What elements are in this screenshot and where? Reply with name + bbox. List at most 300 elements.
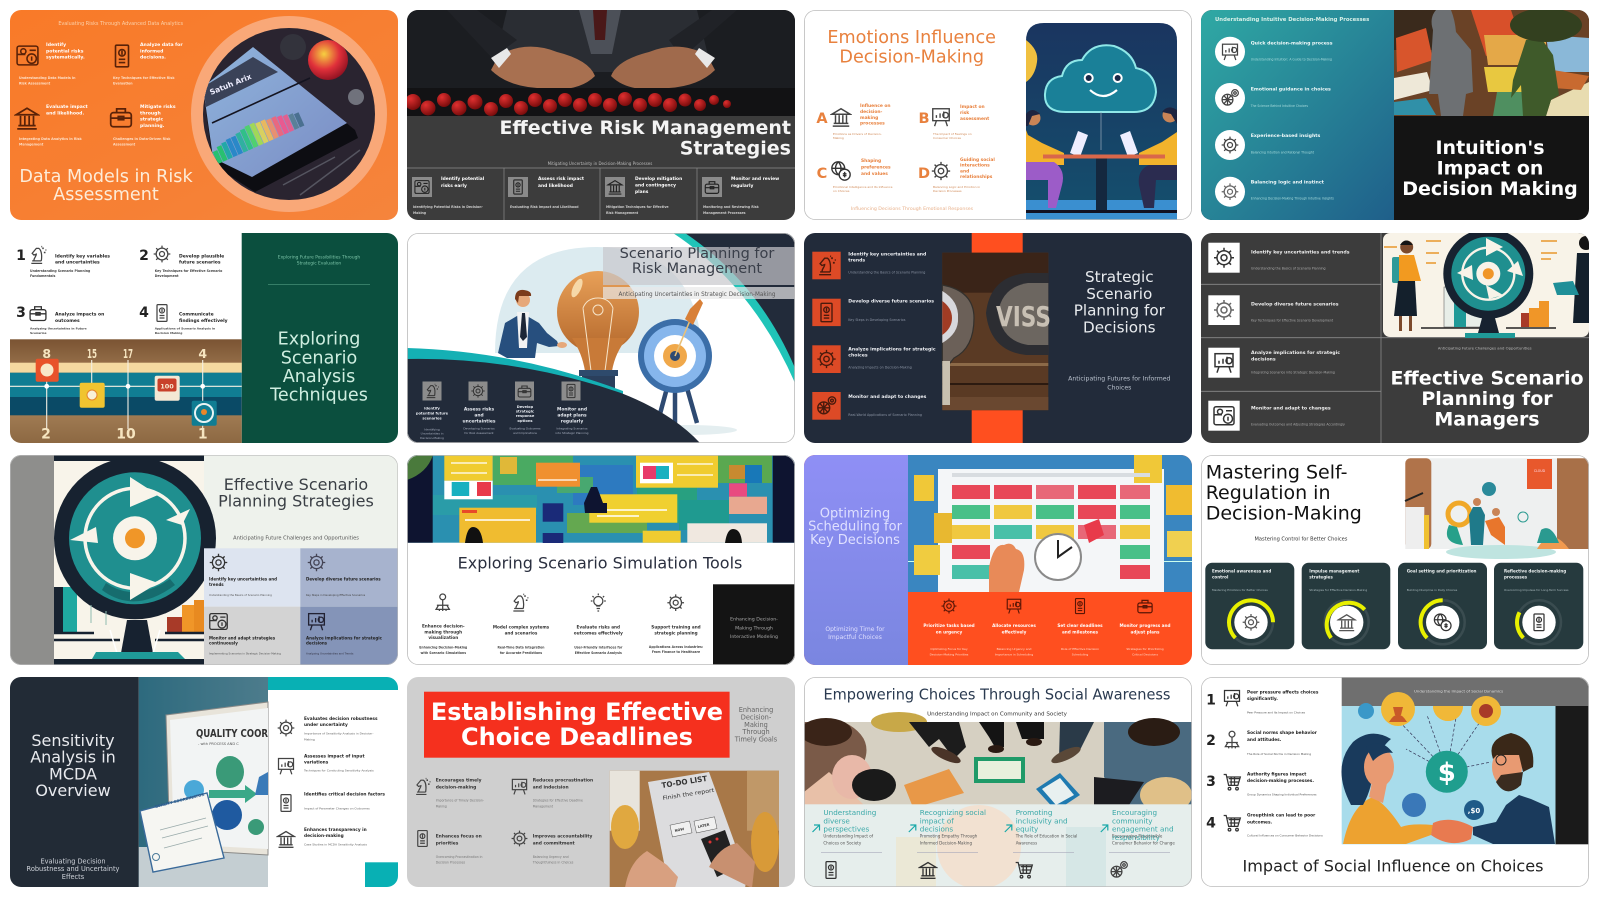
subtitle: Impactful Choices [828, 634, 882, 641]
item 2: effectively [1002, 630, 1027, 635]
icon: brain [1111, 862, 1127, 877]
item 3: equity [1016, 825, 1039, 834]
item 3: Promoting [1016, 808, 1052, 817]
dark callout box [713, 584, 795, 665]
caption 3: Evaluating Outcomes [510, 427, 540, 431]
arrow 4 [1101, 825, 1108, 832]
item: identify: risks early [441, 183, 467, 189]
item 2: decisions [920, 825, 953, 834]
text D: interactions [960, 163, 990, 169]
illustration: scenario dial with managers [1383, 229, 1593, 338]
icon: board [512, 779, 527, 794]
dark card 3: Building Discipline in Daily Choices [1407, 588, 1458, 592]
title: Scenario Planning for [620, 246, 774, 262]
panel: Emotions Influence Decision-Making [804, 10, 1192, 220]
dark card 1: control [1212, 575, 1229, 580]
caption 1: Making [304, 737, 315, 741]
circular photo frame [191, 16, 387, 212]
item 1: Identify key variables [55, 254, 110, 259]
item 1: Enhance decision- [422, 624, 465, 629]
item 4: Enhances transparency in [304, 828, 367, 833]
icon circle 4 [1215, 177, 1245, 207]
caption B: The Impact of Feelings on [933, 132, 972, 136]
caption 2: for Accurate Predictions [500, 651, 542, 655]
title: Scenario [1086, 285, 1152, 303]
item 1: Encourages timely [436, 779, 481, 784]
icon: node [436, 594, 449, 611]
item 3: outcomes effectively [574, 631, 623, 636]
caption 1: Importance of Timely Decision- [436, 799, 484, 803]
dark card 4: processes [1504, 575, 1528, 580]
title: Risk Management [632, 261, 762, 277]
card outline [10, 455, 398, 665]
caption 2: Strategies for Effective Deadline [533, 799, 583, 803]
caption 3: Overcoming Procrastination in [436, 855, 482, 859]
title: Analysis in [30, 748, 116, 767]
panel: Impact of Social Influence on Choices [1201, 677, 1590, 887]
timeline image: 4 [198, 346, 207, 361]
caption 1: Choices on Society [823, 840, 862, 845]
panel: Data Models in Risk Assessment [10, 10, 398, 220]
item 2: and scenarios [505, 631, 538, 636]
illustration: large scenario dial [54, 455, 216, 665]
icon: deadlines [1076, 598, 1084, 614]
item 4: Monitor and adapt to changes [848, 394, 927, 400]
item 2: Assess risks [464, 407, 494, 412]
caption 3: and Implications [513, 431, 537, 435]
caption 1: Understanding the Basics of Scenario Planning [209, 593, 272, 597]
title: Planning for [1421, 388, 1553, 410]
title: Decision Making [1402, 178, 1578, 200]
title: Decision-Making [839, 47, 984, 67]
icon: gears [667, 594, 684, 611]
caption 1: Enhancing Decision-Making [419, 645, 467, 649]
panel: Scenario Planning for Risk Management [407, 233, 795, 443]
caption 4: Case Studies in MCDA Sensitivity Analysis [304, 843, 367, 847]
lower faded band [804, 804, 1192, 889]
dark card 2 [1302, 563, 1390, 649]
dark card 4: Overcoming Impulses for Long-Term Success [1504, 588, 1569, 592]
man presenting [498, 290, 567, 358]
quadrant 1 [204, 548, 300, 607]
title: Scenario [281, 348, 357, 368]
item 1: diverse [823, 816, 850, 825]
text D: Guiding social [960, 158, 995, 163]
callout text: Interactive Modeling [730, 634, 778, 640]
caption 1: Understanding the Basics of Scenario Planning [848, 271, 925, 275]
icon tile 2 [1208, 295, 1240, 325]
caption 3: Analyzing Uncertainties in Future [30, 326, 87, 330]
item 1: potential future [416, 411, 449, 415]
caption 4: Integrating Scenarios [556, 427, 588, 431]
item 4: Encouraging [1112, 808, 1157, 817]
icon tile: identify [412, 177, 432, 197]
side subtitle: Making [744, 721, 768, 729]
caption 4: Evaluating Outcomes and Adjusting Strategies Accordingly [1251, 422, 1345, 426]
icon tile 3 [1208, 348, 1240, 378]
icon: chess [513, 594, 528, 611]
caption D: Balancing Logic and Emotion in [933, 185, 980, 189]
item caption 3: Integrating Data Analytics in Risk [19, 137, 82, 141]
item 2: Develop diverse future scenarios [1251, 301, 1339, 307]
bottom wave navy [407, 359, 700, 443]
card outline [804, 10, 1192, 220]
item 3: Evaluate risks and [577, 624, 620, 629]
text 3: continuously [209, 641, 238, 646]
item 4: and commitment [533, 841, 575, 847]
caption 1: Decision-Making [420, 436, 444, 440]
item 4: regularly [561, 418, 583, 424]
icon tile 4 [1208, 401, 1240, 431]
item 2: Recognizing social [920, 808, 986, 817]
item 4: adjust plans [1131, 630, 1160, 635]
item 3: priorities [436, 841, 459, 847]
title: Regulation in [1206, 482, 1331, 504]
icon: cart 2 [1224, 816, 1240, 831]
item 4: Monitor and [557, 407, 587, 412]
text B: assessment [960, 116, 989, 122]
letter A: A [816, 111, 828, 127]
item 4: findings effectively [179, 318, 228, 324]
photo: team illustration on desk [1405, 458, 1589, 559]
item 2: Model complex systems [493, 624, 549, 629]
item text: identify: Identify [46, 43, 66, 48]
caption 2: Techniques for Conducting Sensitivity Analysis [303, 769, 374, 773]
photo: to-do list in hand: LATER [697, 823, 710, 829]
panel: Optimizing Scheduling for Key Decisions [804, 455, 1192, 665]
caption 3: Mitigation Techniques for Effective [606, 205, 669, 209]
side subtitle: Timely Goals [734, 736, 778, 744]
item 1: visualization [428, 635, 458, 640]
caption 3: User-Friendly Interfaces for [574, 645, 622, 649]
item text: analyze: informed [140, 48, 163, 54]
subtitle: Mastering Control for Better Choices [1255, 536, 1348, 542]
item 1 caption: Understanding Intuition: A Guide to Decision-Making [1251, 58, 1332, 62]
timeline image: 10 [116, 427, 136, 443]
subtitle: Effects [62, 873, 85, 881]
photo: quality poster and certificate: QUALITY COOR [196, 727, 268, 740]
caption 4: Critical Decisions [1132, 652, 1158, 656]
caption 1: Peer Pressure and Its Impact on Choices [1247, 710, 1306, 714]
caption 4: Applications of Scenario Analysis in [155, 326, 215, 330]
title: Strategies [680, 138, 791, 160]
title: MCDA [49, 764, 97, 783]
item: monitor: Monitor and review [731, 177, 779, 182]
grid dividers [407, 168, 795, 220]
item caption 2: Key Techniques for Effective Risk [113, 76, 175, 80]
item 4: decision-making [304, 833, 344, 839]
number 3: 3 [1206, 774, 1216, 790]
item 3: choices [848, 353, 868, 359]
item 1: Evaluates decision robustness [304, 717, 378, 722]
text A: making [860, 115, 878, 121]
caption 2: Balancing Urgency and [997, 647, 1031, 651]
item 2: future scenarios [179, 259, 221, 265]
panel: Mastering Self-Regulation in Decision-Making [1201, 455, 1589, 665]
arrow 2 [909, 825, 916, 832]
caption 3: Decision Processes [436, 860, 465, 864]
icon tile 2 [468, 382, 488, 400]
panel: Intuition's Impact on Decision Making [1201, 8, 1589, 220]
subtitle: Understanding Impact on Community and Society [927, 712, 1068, 718]
item 2: Emotional guidance in choices [1251, 87, 1331, 93]
caption 2: Key Techniques for Effective Scenario [155, 269, 222, 273]
item 4: Groupthink can lead to poor [1247, 814, 1315, 819]
item 3 caption: Balancing Intuition and Rational Thought [1251, 150, 1315, 154]
letter C: C [817, 166, 827, 182]
title: Techniques [269, 386, 368, 406]
item caption 3: Management [19, 142, 44, 146]
caption 4: Consumer Behavior for Change [1112, 840, 1175, 845]
caption 4: Cultural Influences on Consumer Behavior Decisions [1247, 834, 1323, 838]
title: Scheduling for [808, 520, 903, 535]
icon: cart [1224, 774, 1240, 790]
caption 2: Real-Time Data Integration [498, 645, 544, 649]
icon: bulb [591, 594, 606, 611]
subtitle: Exploring Future Possibilities Through [278, 256, 360, 261]
item text: identify: systematically. [46, 55, 85, 61]
title: Analysis [283, 367, 355, 387]
number 2: 2 [1206, 733, 1216, 749]
caption 2: Key Steps in Developing Effective Scenarios [306, 593, 366, 597]
subtitle: Evaluating Decision [40, 857, 106, 865]
text 3: Monitor and adapt strategies [209, 635, 275, 640]
item 1: decision-making [436, 785, 476, 791]
timeline image: 8 [42, 346, 51, 361]
item 3: inclusivity and [1016, 816, 1068, 825]
table rules [1201, 233, 1589, 443]
top-right navy shape [682, 233, 795, 383]
side subtitle: Through [741, 728, 770, 736]
top teal bar [268, 677, 398, 690]
callout text: Making Through [735, 625, 773, 631]
icon: chess [416, 779, 430, 794]
teal curve [673, 233, 795, 383]
timeline image: 2 [41, 427, 51, 443]
subtitle: Choices [1107, 384, 1131, 391]
title: Mastering Self- [1206, 461, 1348, 483]
item 1: scenarios [422, 416, 442, 420]
item 1: Prioritize tasks based [923, 623, 975, 628]
orange bar [972, 233, 1023, 443]
photo: to-do list in hand: NOW [674, 827, 685, 833]
card outline [1201, 455, 1589, 665]
text B: risk [960, 110, 969, 116]
icon tile 2 [812, 299, 841, 326]
icon circle 3 [1215, 130, 1245, 160]
icon: worker [210, 614, 227, 629]
caption 2: Key Steps in Developing Scenarios [848, 318, 906, 322]
icon: globe coin [832, 162, 850, 180]
caption 2: Development [155, 274, 179, 278]
icon: bulb gear [278, 720, 294, 736]
dark card 2: Impulse management [1309, 569, 1359, 574]
title: Establishing Effective [431, 698, 723, 726]
caption 1: Importance of Sensitivity Analysis in Decision- [304, 732, 373, 736]
item text: evaluate: Evaluate impact [46, 105, 88, 110]
item text: analyze: Analyze data for [140, 43, 183, 48]
illustration: smiling cloud and people [1026, 23, 1178, 220]
gray header band [1342, 677, 1590, 706]
photo: to-do list in hand: TO-DO LIST [661, 774, 709, 790]
photo: analytics tablet [200, 25, 380, 205]
card outline [804, 677, 1192, 887]
side subtitle: Decision- [741, 713, 772, 721]
icon: network tower [1225, 731, 1239, 748]
quadrant 4 [300, 607, 398, 665]
target with arrow [637, 299, 737, 435]
number 4: 4 [1206, 815, 1216, 831]
caption 2: Key Techniques for Effective Scenario Development [1251, 319, 1334, 323]
subtitle: Mitigating Uncertainty in Decision-Making Processes [548, 161, 652, 166]
dark card 3: Goal setting and prioritization [1407, 569, 1477, 574]
caption 3: Impact of Parameter Changes on Outcomes [304, 806, 370, 810]
illustration: influence and handshake [1341, 692, 1590, 844]
item text: mitigate: Mitigate risks [140, 105, 176, 110]
icon: gear A [308, 554, 325, 571]
photo: vision bulb on wood [942, 253, 1051, 410]
title: Planning for [1074, 302, 1166, 320]
icon: briefcase [111, 109, 131, 127]
icon: resources [1007, 599, 1021, 614]
caption 1: Making [413, 211, 427, 215]
icon tile 1 [422, 382, 442, 400]
arrow 1 [812, 825, 820, 832]
navy left column [10, 677, 139, 887]
item 1: Peer pressure affects choices [1247, 690, 1318, 695]
item 1: Identify key uncertainties and [848, 252, 926, 257]
item 1: Understanding [823, 808, 876, 817]
icon tile: monitor [702, 177, 722, 197]
text C: preferences [861, 164, 891, 170]
item 1: on urgency [936, 630, 962, 635]
caption 1: Optimizing Focus for Key [930, 647, 968, 651]
caption 3: Analyzing Impacts on Decision-Making [848, 365, 912, 369]
icon: growth arrows [933, 109, 949, 126]
icon: case study [278, 832, 294, 847]
icon circle 1 [1215, 37, 1245, 67]
timeline image: 1 [198, 427, 208, 443]
timeline image: 100 [160, 382, 174, 390]
item 2: uncertainties [463, 418, 496, 424]
card outline [407, 233, 795, 443]
icon: money tower [832, 109, 850, 126]
item 2: Social norms shape behavior [1247, 731, 1317, 736]
item 1: significantly. [1247, 696, 1278, 702]
green right panel [242, 233, 399, 443]
illustration: influence and handshake: ,$0 [1468, 807, 1480, 815]
item 3: Develop [517, 405, 533, 409]
item 2: and [474, 412, 484, 418]
item 3: Analyze implications for strategic [848, 347, 936, 352]
number 4: 4 [139, 305, 149, 321]
icon: document [281, 795, 291, 811]
caption 3: Role of Effective Decision [1061, 647, 1099, 651]
photo: executive with red marbles [405, 10, 795, 116]
icon: document tower [826, 862, 836, 878]
item 2 caption: The Science Behind Intuitive Choices [1250, 104, 1308, 108]
title: Effective Risk Management [499, 117, 791, 139]
caption B: Consumer Choices [933, 136, 961, 140]
number 2: 2 [139, 248, 149, 264]
image: simulation dashboard [407, 455, 796, 543]
item 1: Identify [424, 406, 440, 410]
caption 1: Understanding the Basics of Scenario Planning [1251, 266, 1326, 270]
text D: relationships [960, 174, 993, 180]
item 1: Identify key uncertainties and trends [1251, 249, 1350, 255]
panel: Exploring Scenario Simulation Tools [407, 455, 796, 665]
icon tile 3 [515, 382, 534, 400]
photo: to-do list in hand: Finish the report [662, 788, 716, 802]
item 3: Experience-based insights [1251, 133, 1321, 139]
title: Optimizing [820, 506, 890, 521]
timeline image: 15 [87, 346, 97, 361]
side subtitle: Enhancing [739, 706, 773, 714]
photo: group around boards [800, 712, 1192, 813]
icon: gear figure [932, 162, 950, 180]
caption 2: Promoting Empathy Through [920, 833, 977, 838]
photo: two figures among cards [1394, 8, 1589, 116]
icon: analysis board [309, 614, 324, 630]
icon: monitor [1138, 600, 1152, 613]
item 4: responsibility [1112, 833, 1161, 842]
quadrant 2 [300, 548, 398, 607]
text 2: Develop diverse future scenarios [306, 577, 381, 582]
item text: analyze: decisions. [140, 55, 166, 61]
caption D: Decision Processes [933, 189, 962, 193]
caption 2: The Role of Social Norms in Decision Making [1246, 752, 1311, 756]
caption 4: Balancing Urgency and [533, 855, 569, 859]
title: Data Models in Risk [19, 167, 193, 187]
title: Effective Scenario [1390, 368, 1584, 390]
item caption 2: Evaluation [113, 81, 133, 85]
item 2: and attitudes. [1247, 737, 1282, 743]
letter B: B [918, 111, 930, 127]
item 4: Balancing logic and instinct [1251, 179, 1325, 185]
dark card 4 [1494, 563, 1583, 649]
card outline [1201, 677, 1589, 887]
item 2: Develop diverse future scenarios [848, 299, 934, 305]
icon: bulb gears [154, 246, 170, 262]
title: Sensitivity [31, 731, 115, 750]
caption 1: Identifying [424, 427, 440, 431]
panel: Establishing Effective Choice Deadlines [407, 677, 795, 888]
timeline image [10, 339, 242, 443]
icon: monitor [1224, 690, 1240, 706]
item 1: trends [848, 257, 865, 263]
gray strip [10, 455, 54, 665]
item 4: Support training and [651, 624, 701, 629]
title: Managers [1434, 408, 1540, 430]
icon: bulb gears [210, 554, 227, 571]
text 1: Identify key uncertainties and [209, 577, 277, 582]
item: monitor: regularly [731, 183, 754, 189]
subtitle: Robustness and Uncertainty [27, 865, 120, 873]
dark card 4: Reflective decision-making [1504, 569, 1566, 574]
item: assess: and likelihood [538, 183, 573, 189]
icon: graduation [920, 862, 936, 878]
caption C: on Choices [833, 189, 850, 193]
item 3: Enhances focus on [436, 835, 482, 840]
item 3: Analyze impacts on [55, 312, 104, 317]
subtitle: Anticipating Future Challenges and Opportunities [233, 536, 359, 542]
item 1: perspectives [823, 825, 870, 834]
item: assess: Assess risk impact [538, 177, 584, 182]
item 3: decisions [1251, 357, 1276, 363]
title: Intuition's [1435, 137, 1545, 159]
dark card 2: strategies [1309, 575, 1333, 580]
caption 3: Risk Management [606, 211, 639, 215]
